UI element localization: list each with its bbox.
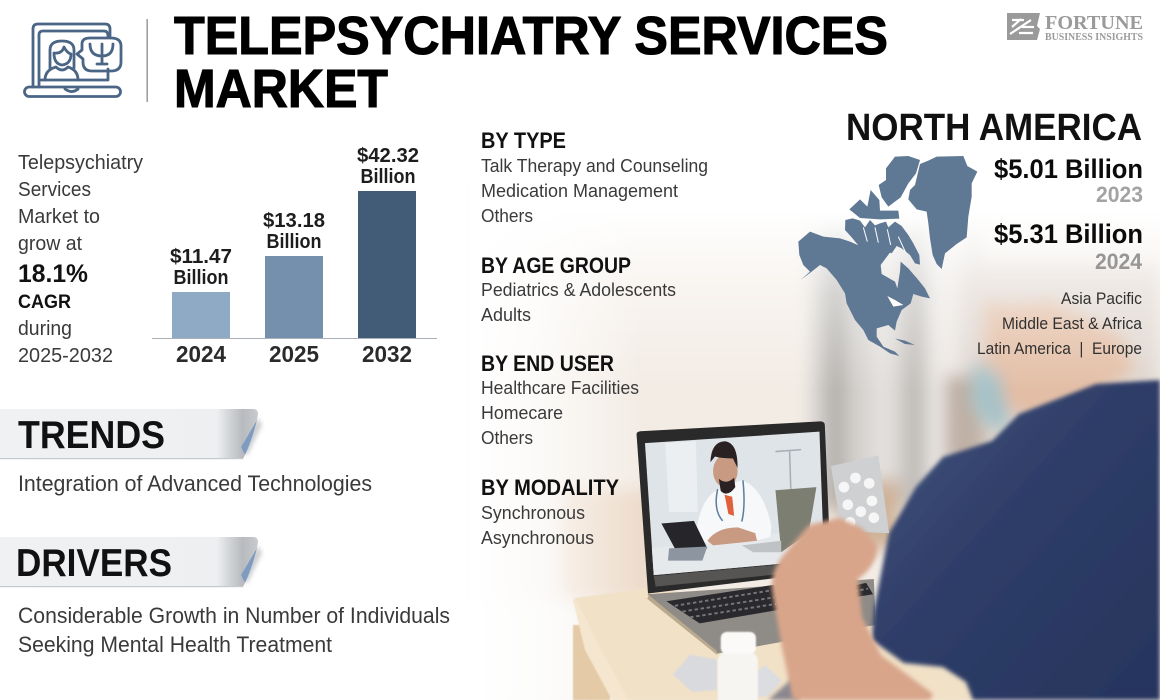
segmentation: by end user: Healthcare Facilities [481,377,639,398]
regional value 2023: 2023 [1096,182,1143,207]
other regions list: Latin America | Europe [977,340,1142,358]
photo: patient on a video consultation [470,150,1160,700]
bar chart: $42.32 [357,145,419,167]
table [573,588,980,700]
segmentation: by type: Others [481,205,533,226]
laptop [637,421,876,655]
panel: drivers: Seeking Mental Health Treatment [18,632,332,657]
regional value 2023: $5.01 Billion [994,154,1143,184]
segmentation: by age group: Adults [481,304,531,325]
region heading: NORTH AMERICA [846,107,1142,149]
segmentation: by end user: Others [481,427,533,448]
blister pack of pills [831,455,889,533]
CAGR text block: Market to [18,206,100,228]
segmentation: by age group [481,253,676,325]
bar chart: 2032 [362,341,412,367]
CAGR text block: CAGR [18,291,71,313]
title [174,6,888,119]
map: North America [798,156,977,356]
segmentation: by type: Medication Management [481,180,678,201]
ribbon: drivers [0,537,262,587]
panel: trends: Integration of Advanced Technologies [18,471,372,496]
bar chart: 2024 [176,341,226,367]
panel: drivers: DRIVERS [16,542,172,585]
segmentation: by modality [481,475,619,548]
regional value 2024 [994,219,1143,274]
panel: drivers: Considerable Growth in Number of Individuals [18,603,450,628]
ribbon: trends [0,409,262,459]
CAGR text block: grow at [18,233,82,255]
white fades [470,150,1160,390]
panel: trends: TRENDS [18,414,165,457]
segmentation: by age group: Pediatrics & Adolescents [481,279,676,300]
other regions list: Asia Pacific [1061,290,1142,308]
bar chart: Billion [266,231,322,253]
segmentation: by end user [481,351,639,448]
segmentation: by modality: Synchronous [481,502,585,523]
CAGR text block [18,152,143,367]
divider [146,19,148,102]
bar chart: Billion [174,267,228,289]
regional value 2024: 2024 [1095,249,1143,274]
logo: Fortune Business Insights [1007,12,1143,43]
bar chart: $13.18 [263,210,325,232]
CAGR text block: 2025-2032 [18,345,113,367]
CAGR text block: during [18,318,72,340]
regional value 2023 [994,154,1143,207]
segmentation: by type: Talk Therapy and Counseling [481,155,708,176]
logo: Fortune Business Insights: BUSINESS INSIGHTS [1045,32,1143,43]
regional value 2024: $5.31 Billion [994,219,1143,249]
bar chart: 2025 [269,341,319,367]
header icon: laptop with psychiatrist [24,24,121,96]
blurred room [480,180,1160,700]
bar chart: $11.47 [170,246,232,268]
patient shirt [872,380,1160,700]
doctor on screen [652,441,824,575]
title: MARKET [174,59,388,119]
bar chart [152,145,437,367]
trousers [768,678,800,700]
segmentation: by end user: Homecare [481,402,563,423]
patient arm and hand [772,518,933,700]
title: TELEPSYCHIATRY SERVICES [174,6,888,66]
panel: trends [0,409,372,496]
pill bottle and blisters [673,632,782,700]
CAGR text block: Services [18,179,91,201]
segmentation: by modality: BY MODALITY [481,475,619,500]
CAGR text block: 18.1% [18,260,88,288]
segmentation: by type: BY TYPE [481,128,566,153]
bar chart: Billion [360,166,416,188]
other regions list: Middle East & Africa [1002,315,1143,333]
panel: drivers [0,537,450,657]
segmentation: by modality: Asynchronous [481,527,594,548]
logo: Fortune Business Insights: FORTUNE [1045,12,1143,34]
segmentation: by age group: BY AGE GROUP [481,253,631,278]
head with face mask [970,300,1135,430]
CAGR text block: Telepsychiatry [18,152,143,174]
segmentation: by type [481,128,708,226]
other regions list [977,290,1143,358]
segmentation: by end user: BY END USER [481,351,614,376]
